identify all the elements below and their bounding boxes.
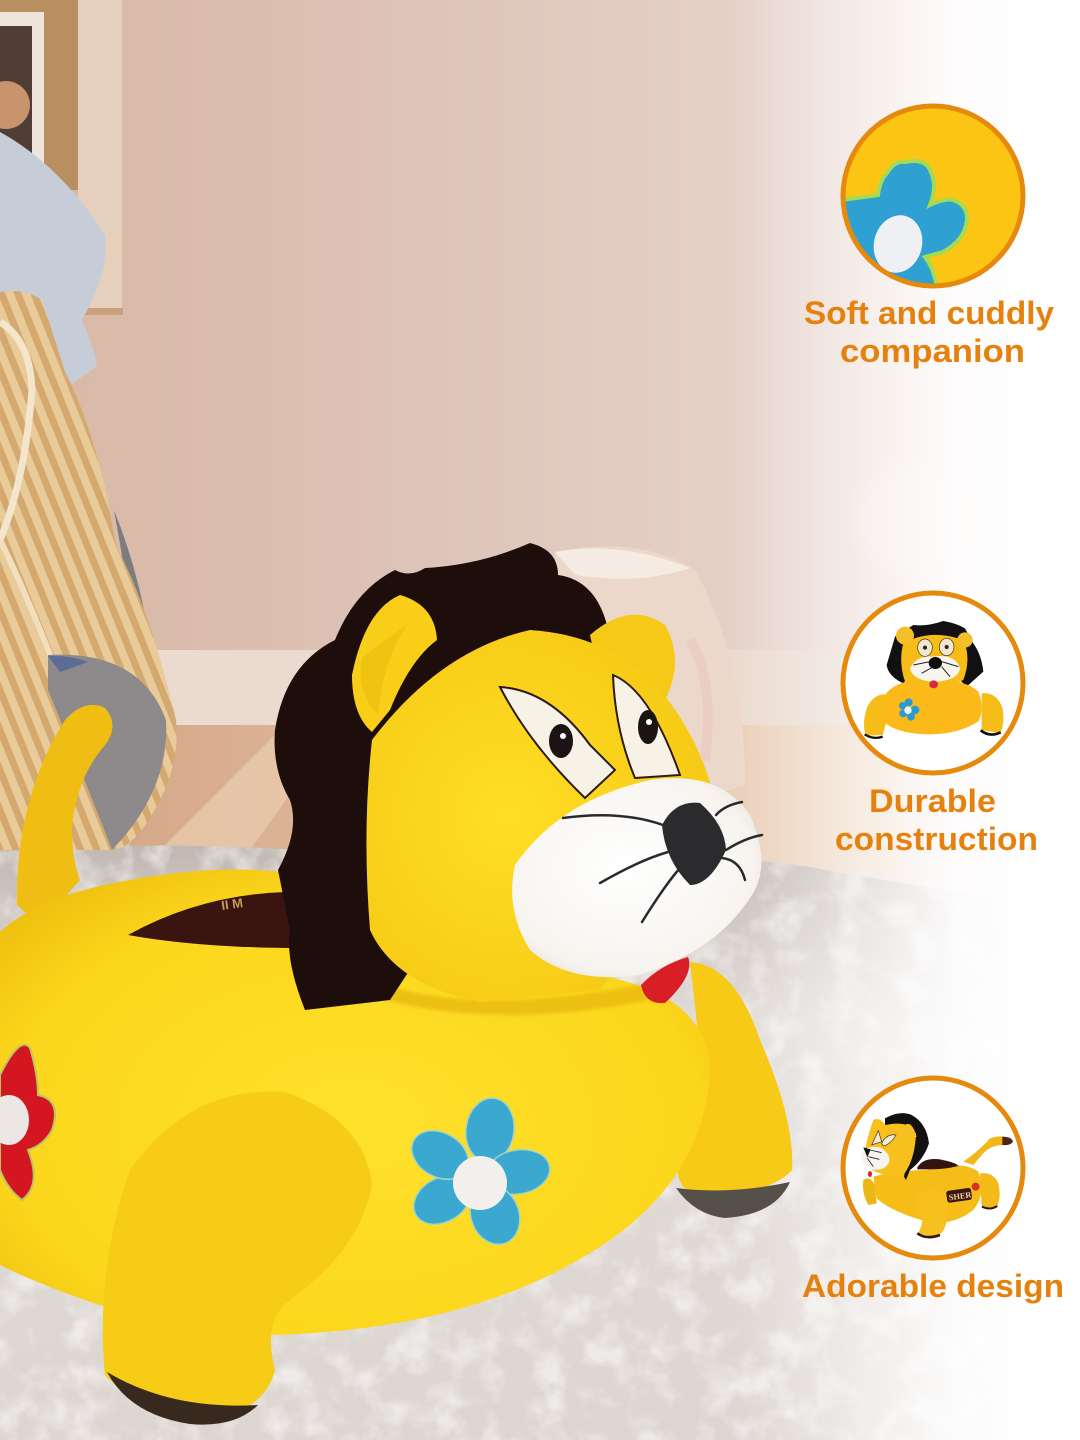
far leg — [676, 962, 792, 1218]
small flower — [899, 698, 919, 721]
picture frame — [0, 0, 123, 315]
head — [366, 630, 720, 1002]
white fade panel — [730, 0, 1080, 1440]
nose — [662, 803, 726, 885]
feature 1 label: companion — [840, 333, 1025, 369]
tail — [963, 1136, 1005, 1165]
face — [872, 1131, 882, 1145]
feature 1 label: Soft and cuddly — [804, 295, 1054, 331]
feature 3 circle: side view — [843, 1078, 1023, 1258]
head — [901, 635, 967, 688]
striped blanket — [0, 291, 177, 850]
plush lion — [0, 543, 792, 1425]
SHER badge — [946, 1183, 980, 1203]
feature 2 label — [835, 783, 1038, 857]
grey knit — [48, 655, 166, 850]
mane — [887, 621, 983, 687]
feature 2 circle: front view — [843, 593, 1023, 773]
SHER badge: SHER — [948, 1190, 973, 1202]
body — [873, 1165, 982, 1223]
eyes — [500, 675, 680, 798]
stool — [555, 546, 745, 800]
seat — [917, 1159, 958, 1169]
grey knit far — [114, 510, 148, 632]
feature 3 label: Adorable design — [802, 1268, 1064, 1304]
blue cloth — [0, 132, 106, 384]
seat lettering: II M — [220, 895, 244, 913]
mane — [275, 543, 607, 1010]
shadow under head — [385, 985, 650, 1015]
feature 2 label: construction — [835, 821, 1038, 857]
feature 2 label: Durable — [869, 783, 996, 819]
tail — [17, 705, 112, 925]
arms — [864, 694, 890, 736]
near front far leg — [863, 1178, 877, 1205]
far ear — [590, 615, 675, 700]
near ear — [352, 595, 437, 732]
feature 1 circle: flower closeup — [835, 106, 1023, 290]
muzzle — [512, 778, 761, 977]
far leg — [980, 1173, 1000, 1208]
front leg — [103, 1091, 372, 1425]
front leg — [916, 1191, 948, 1237]
tongue — [641, 957, 689, 1003]
whiskers — [563, 802, 762, 922]
muzzle — [910, 656, 960, 682]
torso — [883, 680, 982, 734]
seat — [128, 892, 300, 948]
red flower — [0, 1045, 55, 1200]
mane — [885, 1113, 929, 1180]
rug — [0, 846, 919, 1440]
head — [865, 1119, 916, 1175]
body — [0, 870, 710, 1335]
feature 1 label — [804, 295, 1054, 369]
faint stool far right — [855, 465, 965, 575]
blue flower — [403, 1095, 553, 1251]
